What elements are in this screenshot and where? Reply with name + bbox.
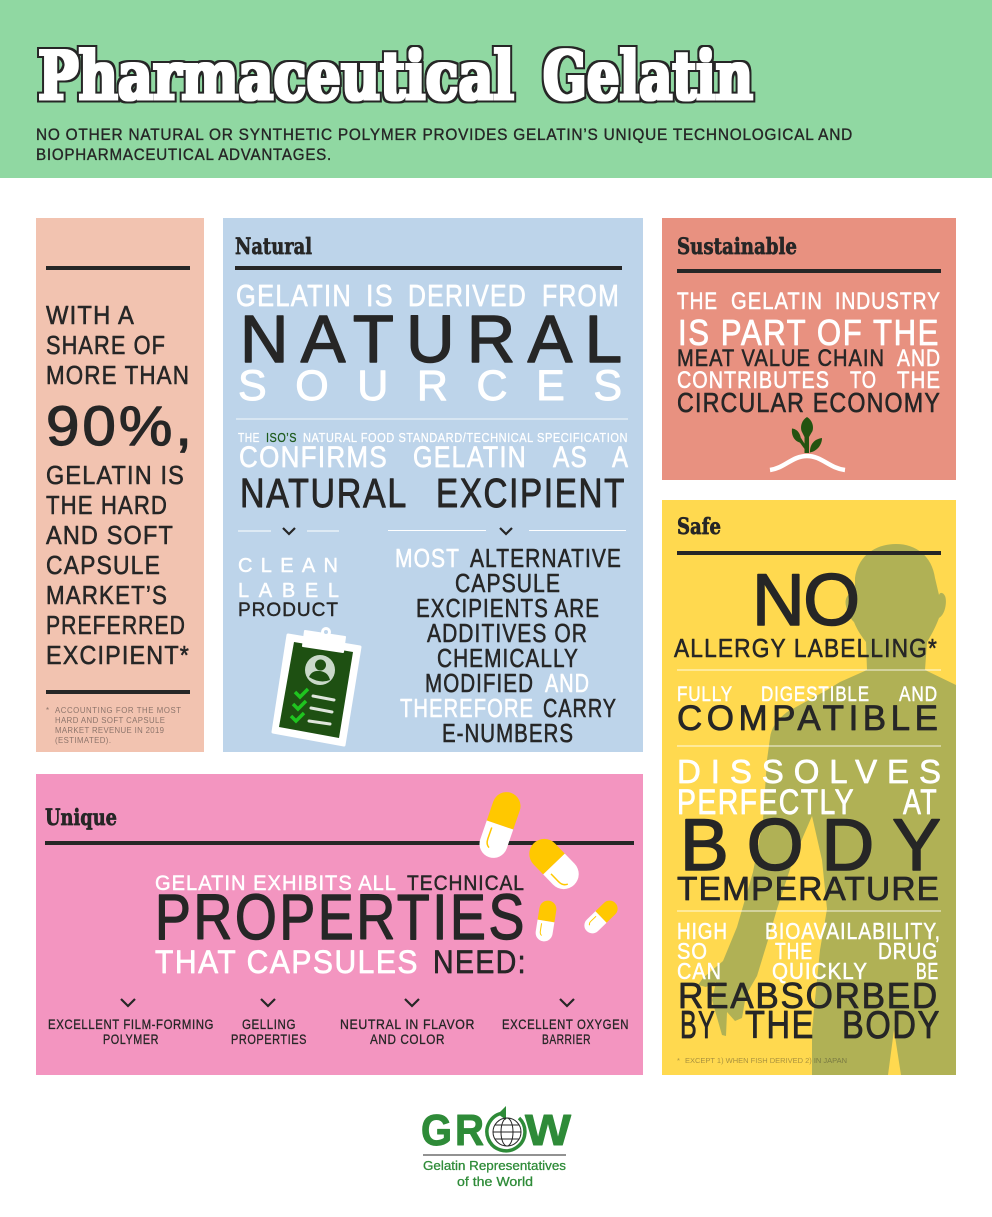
share statement: AND SOFT [46, 520, 174, 550]
footnote [46, 706, 181, 745]
alternative excipients text: CHEMICALLY [437, 643, 579, 673]
ISO statement: AS [553, 441, 588, 474]
no allergy labelling: ALLERGY LABELLING* [674, 633, 938, 663]
ISO statement: CONFIRMS [239, 441, 388, 474]
title: Gelatin [543, 37, 753, 115]
share statement: CAPSULE [46, 550, 161, 580]
natural sources statement: GELATIN [236, 278, 352, 313]
alternative excipients text: ADDITIVES OR [427, 618, 588, 648]
footnote: * [677, 1056, 680, 1065]
ISO statement: NATURAL FOOD STANDARD/TECHNICAL SPECIFICATION [303, 431, 628, 445]
logo: GROW: G [421, 1106, 452, 1155]
alternative excipients text: CAPSULE [455, 568, 561, 598]
ISO statement: ISO’S [266, 431, 297, 445]
bioavailability: REABSORBED [678, 975, 939, 1016]
sustainable statement: GELATIN [731, 288, 823, 315]
sustainable statement: THE [677, 288, 718, 315]
heading: sustainable: Sustainable [677, 234, 797, 260]
heading: natural: Natural [235, 234, 312, 260]
sustainable statement [677, 288, 941, 418]
alternative excipients text [395, 543, 622, 748]
dissolves: TEMPERATURE [677, 871, 939, 908]
property chevrons [121, 999, 574, 1006]
logo: GROW: Gelatin Representatives [423, 1159, 566, 1173]
alternative excipients text: THEREFORE [400, 693, 534, 723]
property labels: EXCELLENT FILM-FORMING [48, 1017, 214, 1032]
panel: natural [223, 218, 643, 752]
digestible: FULLY [677, 682, 733, 706]
property labels: EXCELLENT OXYGEN [502, 1017, 629, 1032]
panel: safe [662, 500, 956, 1075]
share statement: MARKET’S [46, 580, 168, 610]
logo: GROW: W [525, 1106, 572, 1155]
bioavailability: THE [775, 938, 813, 964]
panel: unique [36, 774, 643, 1075]
sustainable statement: IS PART OF THE [678, 312, 940, 353]
dividers with chevrons [238, 528, 626, 534]
natural sources statement: NATURAL [240, 302, 622, 377]
footnote: ACCOUNTING FOR THE MOST [55, 706, 181, 715]
share statement: THE HARD [46, 490, 168, 520]
bioavailability: BIOAVAILABILITY, [765, 918, 941, 944]
share statement: 90%, [46, 394, 195, 457]
panel: market share [36, 218, 204, 752]
footnote: (ESTIMATED). [55, 736, 111, 745]
no allergy labelling [674, 560, 938, 663]
capsule three [534, 899, 558, 943]
natural sources statement: DERIVED [408, 278, 527, 313]
footnote: EXCEPT 1) WHEN FISH DERIVED 2) IN JAPAN [685, 1056, 847, 1065]
share statement: PREFERRED [46, 610, 186, 640]
sustainable statement: CIRCULAR ECONOMY [677, 387, 941, 418]
clean label product [238, 555, 339, 621]
sustainable statement: THE [897, 367, 941, 394]
share statement: MORE THAN [46, 360, 190, 390]
heading: unique: Unique [45, 805, 117, 831]
icon: clipboard [273, 627, 360, 745]
properties statement: NEED: [433, 944, 527, 980]
dissolves [677, 753, 941, 908]
icon: sprout [770, 417, 845, 470]
footnote: * [46, 706, 49, 715]
share statement: EXCIPIENT* [46, 640, 190, 670]
capsule one [476, 788, 524, 862]
dissolves: PERFECTLY [677, 783, 855, 822]
natural sources statement: IS [366, 278, 394, 313]
icon: globe with arrow [487, 1106, 525, 1151]
property labels: BARRIER [542, 1032, 591, 1047]
heading: safe: Safe [677, 514, 721, 540]
sustainable statement: INDUSTRY [835, 288, 941, 315]
ISO statement: GELATIN [413, 441, 527, 474]
natural sources statement: SOURCES [238, 362, 622, 410]
bioavailability: QUICKLY [772, 958, 868, 984]
panel: sustainable [662, 218, 956, 480]
sustainable statement: MEAT VALUE CHAIN [677, 345, 885, 372]
dissolves: AT [903, 783, 938, 822]
alternative excipients text: CARRY [543, 693, 617, 723]
ISO statement: EXCIPIENT [436, 470, 626, 516]
bioavailability: THE [745, 1004, 815, 1047]
share statement [46, 300, 195, 670]
property labels: POLYMER [103, 1032, 159, 1047]
alternative excipients text: MODIFIED [425, 668, 534, 698]
share statement: GELATIN IS [46, 460, 185, 490]
clean label product: PRODUCT [238, 600, 338, 621]
properties statement: THAT CAPSULES [155, 944, 419, 980]
bioavailability: BODY [842, 1004, 941, 1047]
logo: GROW: of the World [457, 1175, 533, 1189]
bioavailability: HIGH [677, 918, 728, 944]
digestible: DIGESTIBLE [761, 682, 870, 706]
alternative excipients text: E-NUMBERS [442, 718, 574, 748]
property labels: AND COLOR [370, 1032, 445, 1047]
sustainable statement: TO [850, 367, 877, 394]
natural sources statement [236, 278, 622, 410]
header band [0, 0, 992, 178]
logo: GROW: R [455, 1106, 484, 1155]
bioavailability [677, 918, 941, 1047]
capsule four [581, 897, 621, 937]
icon: capsules [476, 788, 621, 943]
ISO statement [238, 431, 628, 516]
natural sources statement: FROM [542, 278, 620, 313]
body silhouette [698, 544, 956, 1075]
alternative excipients text: EXCIPIENTS ARE [416, 593, 600, 623]
bioavailability: BY [680, 1004, 716, 1047]
logo: GROW [421, 1106, 572, 1189]
properties statement: GELATIN EXHIBITS ALL [155, 871, 397, 895]
subtitle [36, 126, 853, 164]
digestible: COMPATIBLE [677, 699, 938, 738]
clean label product: CLEAN [238, 555, 338, 577]
dissolves: DISSOLVES [677, 753, 941, 790]
properties statement: TECHNICAL [407, 871, 525, 895]
title: Pharmaceutical [38, 37, 514, 115]
property labels: NEUTRAL IN FLAVOR [340, 1017, 475, 1032]
no allergy labelling: NO [752, 560, 860, 641]
bioavailability: CAN [677, 958, 722, 984]
bioavailability: SO [677, 938, 708, 964]
capsule two [523, 833, 585, 895]
footnote: HARD AND SOFT CAPSULE [55, 716, 165, 725]
share statement: WITH A [46, 300, 135, 330]
ISO statement: THE [238, 431, 260, 445]
bioavailability: DRUG [878, 938, 938, 964]
sustainable statement: AND [897, 345, 941, 372]
ISO statement: A [612, 441, 628, 474]
sustainable statement: CONTRIBUTES [677, 367, 830, 394]
property labels [48, 1017, 629, 1047]
ISO statement: NATURAL [240, 470, 408, 516]
share statement: SHARE OF [46, 330, 166, 360]
bioavailability: BE [916, 958, 939, 984]
alternative excipients text: ALTERNATIVE [470, 543, 622, 573]
property labels: GELLING [242, 1017, 296, 1032]
properties statement [155, 871, 527, 980]
alternative excipients text: MOST [395, 543, 460, 573]
clean label product: LABEL [238, 580, 339, 602]
properties statement: PROPERTIES [155, 881, 527, 953]
subtitle: NO OTHER NATURAL OR SYNTHETIC POLYMER PROVIDES GELATIN’S UNIQUE TECHNOLOGICAL AND [36, 126, 853, 144]
digestible [677, 682, 938, 738]
footnote: MARKET REVENUE IN 2019 [55, 726, 164, 735]
digestible: AND [899, 682, 938, 706]
property labels: PROPERTIES [231, 1032, 307, 1047]
subtitle: BIOPHARMACEUTICAL ADVANTAGES. [36, 146, 332, 164]
dissolves: BODY [680, 805, 941, 886]
alternative excipients text: AND [545, 668, 590, 698]
